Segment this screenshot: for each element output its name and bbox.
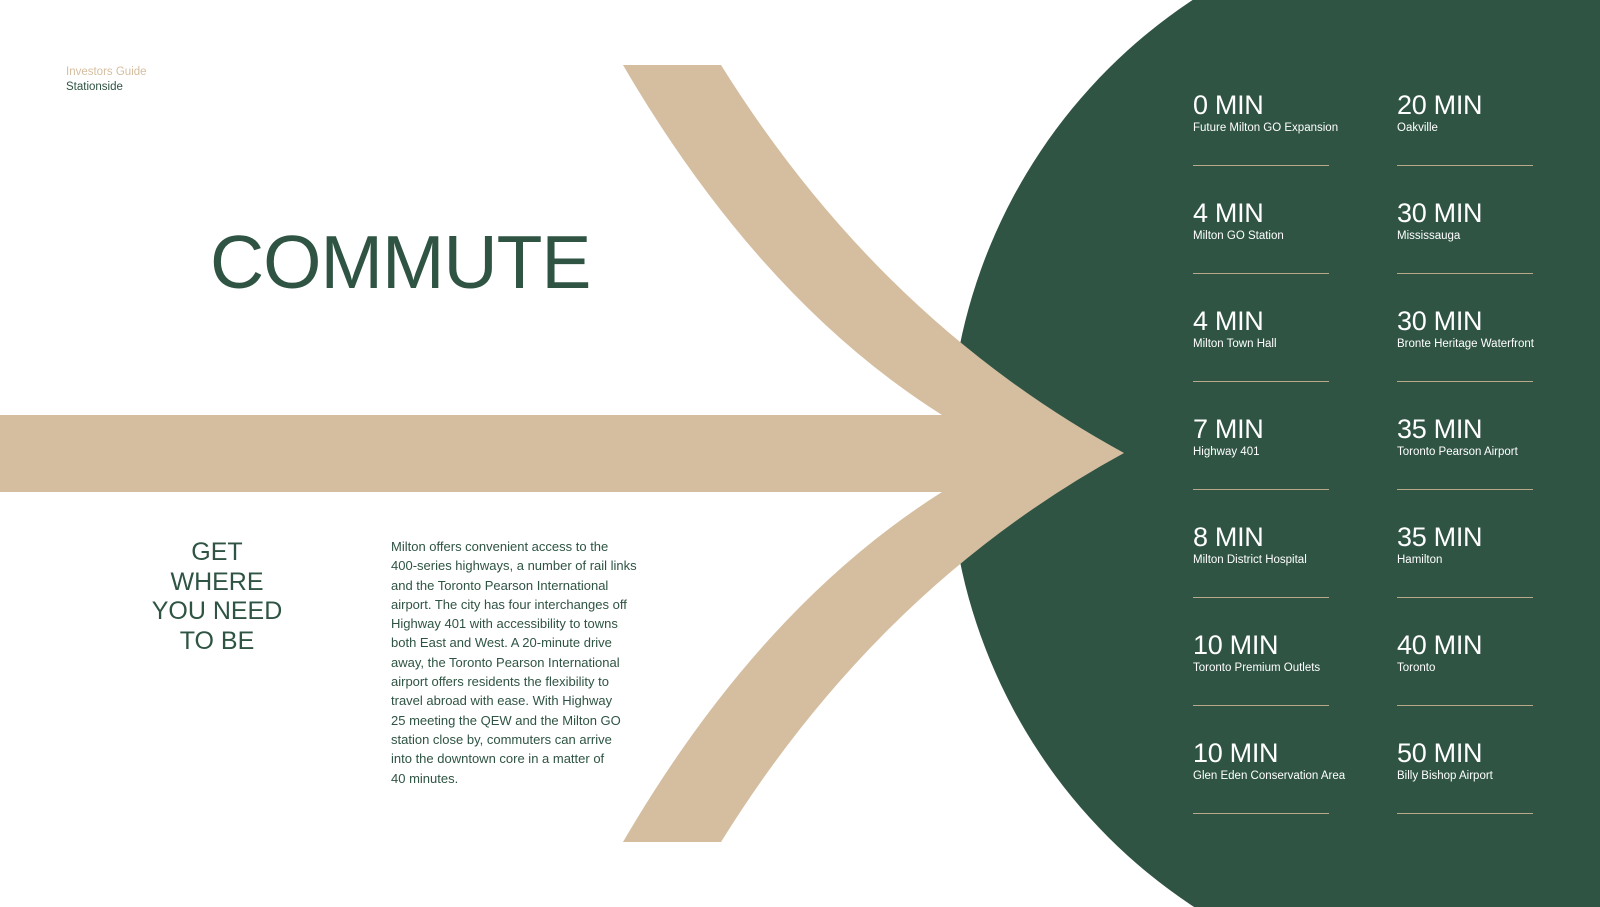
- body paragraph: station close by, commuters can arrive: [391, 732, 612, 747]
- body paragraph: Milton offers convenient access to the: [391, 539, 608, 554]
- commute times list: 8 MIN: [1193, 522, 1264, 552]
- subheading: WHERE: [170, 568, 264, 596]
- subheading: YOU NEED: [152, 597, 282, 625]
- commute times list: Future Milton GO Expansion: [1193, 122, 1338, 134]
- header label: Investors Guide: [66, 66, 147, 78]
- commute times list: Toronto: [1397, 662, 1435, 674]
- body paragraph: 40 minutes.: [391, 771, 458, 786]
- commute times list: 35 MIN: [1397, 522, 1482, 552]
- commute times list: Toronto Premium Outlets: [1193, 662, 1320, 674]
- body paragraph: and the Toronto Pearson International: [391, 578, 608, 593]
- subheading: GET: [191, 538, 243, 566]
- header label: [66, 66, 147, 93]
- body paragraph: both East and West. A 20-minute drive: [391, 635, 612, 650]
- commute times list: 20 MIN: [1397, 90, 1482, 120]
- commute times list: Toronto Pearson Airport: [1397, 446, 1518, 458]
- commute times list: 35 MIN: [1397, 414, 1482, 444]
- commute times list: 50 MIN: [1397, 738, 1482, 768]
- commute times list: Mississauga: [1397, 230, 1460, 242]
- commute times list: Milton Town Hall: [1193, 338, 1277, 350]
- commute times list: Bronte Heritage Waterfront: [1397, 338, 1534, 350]
- body paragraph: 400-series highways, a number of rail links: [391, 558, 637, 573]
- commute times list: Highway 401: [1193, 446, 1259, 458]
- commute times list: 7 MIN: [1193, 414, 1264, 444]
- body paragraph: away, the Toronto Pearson International: [391, 655, 620, 670]
- commute times list: Hamilton: [1397, 554, 1442, 566]
- body paragraph: airport offers residents the flexibility to: [391, 674, 609, 689]
- commute times list: Glen Eden Conservation Area: [1193, 770, 1345, 782]
- commute times list: 30 MIN: [1397, 198, 1482, 228]
- body paragraph: into the downtown core in a matter of: [391, 751, 604, 766]
- commute times list: 4 MIN: [1193, 198, 1264, 228]
- body paragraph: travel abroad with ease. With Highway: [391, 693, 612, 708]
- body paragraph: [391, 539, 637, 786]
- body paragraph: 25 meeting the QEW and the Milton GO: [391, 713, 621, 728]
- body paragraph: Highway 401 with accessibility to towns: [391, 616, 618, 631]
- subheading: TO BE: [180, 627, 254, 655]
- commute times list: 4 MIN: [1193, 306, 1264, 336]
- header label: Stationside: [66, 81, 123, 93]
- commute times list: 30 MIN: [1397, 306, 1482, 336]
- commute times list: 10 MIN: [1193, 630, 1278, 660]
- commute times list: Milton District Hospital: [1193, 554, 1307, 566]
- body paragraph: airport. The city has four interchanges off: [391, 597, 627, 612]
- commute times list: 0 MIN: [1193, 90, 1264, 120]
- arrow: [0, 65, 1124, 842]
- commute times list: 10 MIN: [1193, 738, 1278, 768]
- subheading: [152, 538, 282, 655]
- commute times list: Oakville: [1397, 122, 1438, 134]
- green circle: [949, 0, 1600, 907]
- commute times list: [1193, 90, 1534, 814]
- title: COMMUTE: [210, 220, 590, 304]
- commute times list: Billy Bishop Airport: [1397, 770, 1493, 782]
- commute times list: 40 MIN: [1397, 630, 1482, 660]
- commute times list: Milton GO Station: [1193, 230, 1284, 242]
